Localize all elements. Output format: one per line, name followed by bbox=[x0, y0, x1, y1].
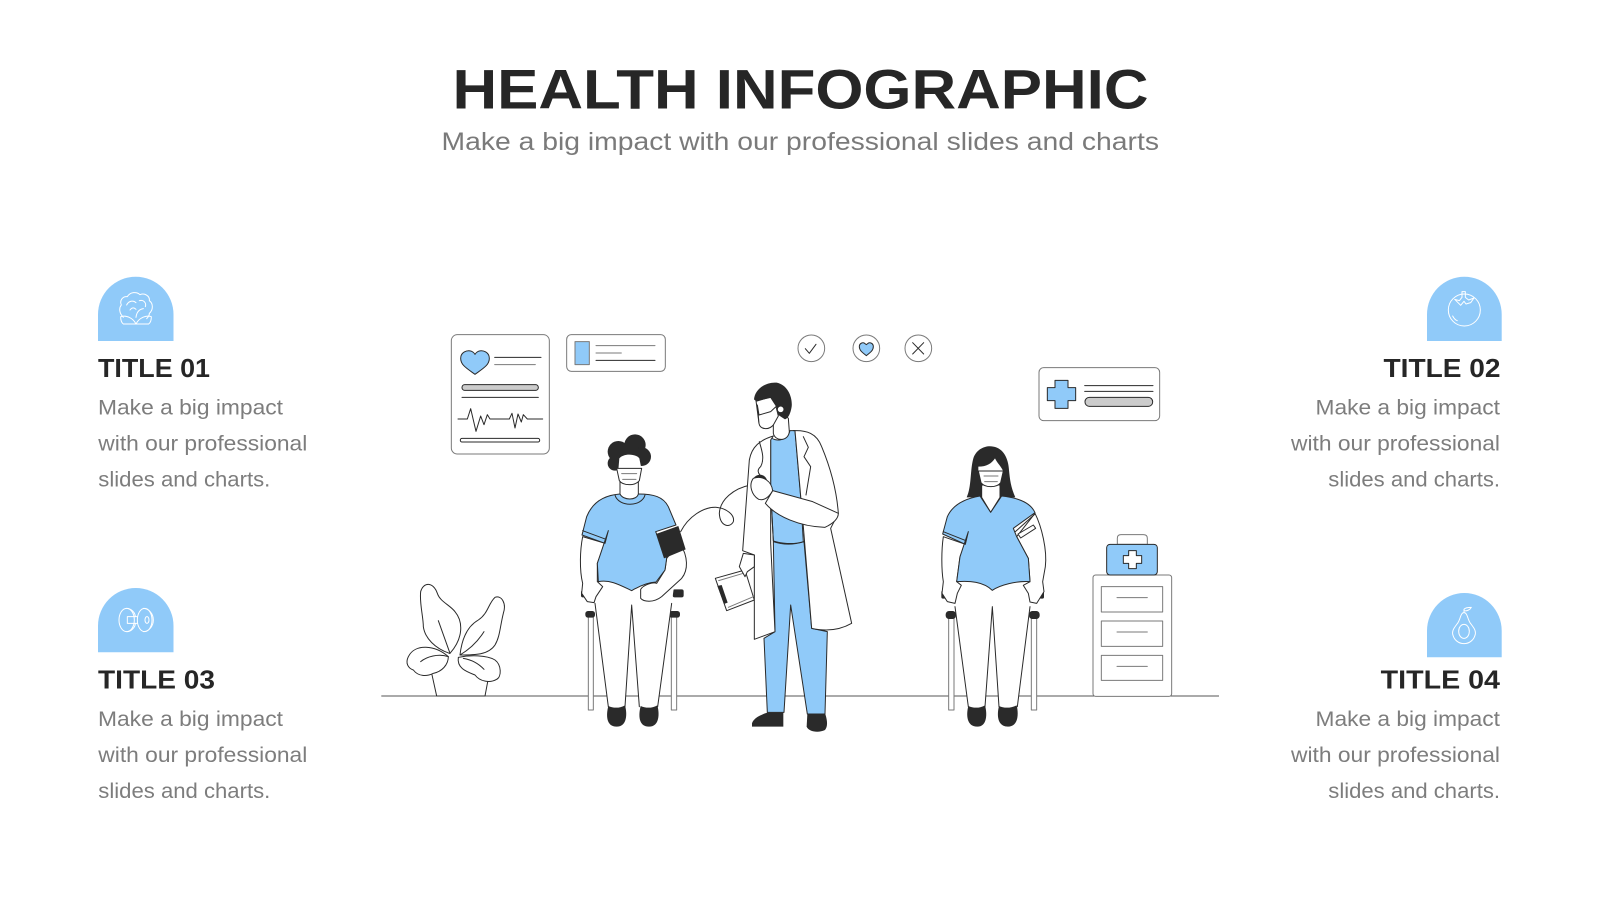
icon: cauliflower badge bbox=[98, 277, 174, 341]
clipboard bbox=[715, 570, 754, 611]
legs bbox=[955, 583, 1030, 707]
text block: slides and charts. bbox=[98, 780, 270, 803]
hand holding clipboard bbox=[739, 553, 754, 577]
stethoscope tube bbox=[681, 485, 751, 532]
seated nurse bbox=[941, 446, 1046, 727]
left arm bbox=[580, 537, 605, 603]
title: HEALTH INFOGRAPHIC bbox=[452, 58, 1148, 120]
text block bbox=[1290, 396, 1500, 492]
shoes bbox=[752, 713, 783, 727]
pants bbox=[764, 542, 827, 714]
text block: Make a big impact bbox=[1316, 396, 1500, 419]
coat bbox=[743, 436, 775, 639]
text block: with our professional bbox=[1290, 744, 1500, 767]
thermometer bbox=[1018, 525, 1036, 538]
text block: Make a big impact bbox=[1316, 708, 1500, 731]
arms bbox=[942, 537, 965, 603]
text block: slides and charts. bbox=[98, 469, 270, 492]
forearm bbox=[765, 491, 838, 527]
text block bbox=[1290, 708, 1500, 803]
text block: with our professional bbox=[97, 744, 307, 767]
legs bbox=[595, 581, 674, 707]
icon: cross circle bbox=[905, 335, 932, 362]
chair bbox=[941, 591, 1044, 710]
plant bbox=[407, 584, 504, 696]
cuff bbox=[656, 526, 686, 558]
card: heart report bbox=[451, 335, 549, 454]
text block: with our professional bbox=[97, 433, 307, 456]
right arm bbox=[641, 543, 686, 601]
card: id card bbox=[567, 335, 665, 371]
central illustration bbox=[381, 335, 1219, 732]
shirt bbox=[943, 496, 1035, 590]
icon: dumbbell badge bbox=[98, 588, 174, 652]
text block: Make a big impact bbox=[98, 396, 283, 419]
heading: TITLE 03 bbox=[98, 665, 215, 695]
panel: title 02 bbox=[1290, 277, 1502, 492]
scrub top bbox=[771, 431, 803, 544]
card: medical cross bbox=[1039, 368, 1160, 421]
icon: heart circle bbox=[853, 335, 880, 362]
icon: avocado badge bbox=[1427, 593, 1502, 657]
mask bbox=[617, 468, 642, 485]
cabinet bbox=[1093, 575, 1172, 696]
panel: title 03 bbox=[97, 588, 307, 803]
neck and face bbox=[982, 485, 1000, 512]
text block: with our professional bbox=[1290, 433, 1500, 456]
doctor bbox=[715, 383, 852, 732]
text block: slides and charts. bbox=[1328, 780, 1500, 803]
panel: title 04 bbox=[1290, 593, 1502, 803]
heading: TITLE 01 bbox=[98, 353, 210, 383]
neck and head bbox=[620, 480, 638, 499]
mask bbox=[757, 405, 778, 429]
text block bbox=[97, 708, 307, 803]
subtitle: Make a big impact with our professional slides and charts bbox=[442, 128, 1159, 156]
seated patient bbox=[580, 434, 751, 727]
icon: first aid kit bbox=[1107, 535, 1157, 575]
hair bbox=[967, 446, 1015, 497]
head bbox=[756, 397, 789, 439]
icon: tomato badge bbox=[1427, 277, 1502, 341]
text block: Make a big impact bbox=[98, 708, 283, 731]
icon: check circle bbox=[798, 335, 825, 362]
text block: slides and charts. bbox=[1328, 469, 1500, 492]
heading: TITLE 02 bbox=[1384, 353, 1500, 383]
shirt bbox=[582, 494, 676, 591]
chair bbox=[581, 589, 684, 710]
heading: TITLE 04 bbox=[1381, 665, 1501, 695]
fist bbox=[753, 475, 767, 482]
floor line bbox=[381, 695, 1219, 697]
text block bbox=[97, 396, 307, 492]
panel: title 01 bbox=[97, 277, 307, 492]
mask bbox=[978, 471, 1003, 487]
